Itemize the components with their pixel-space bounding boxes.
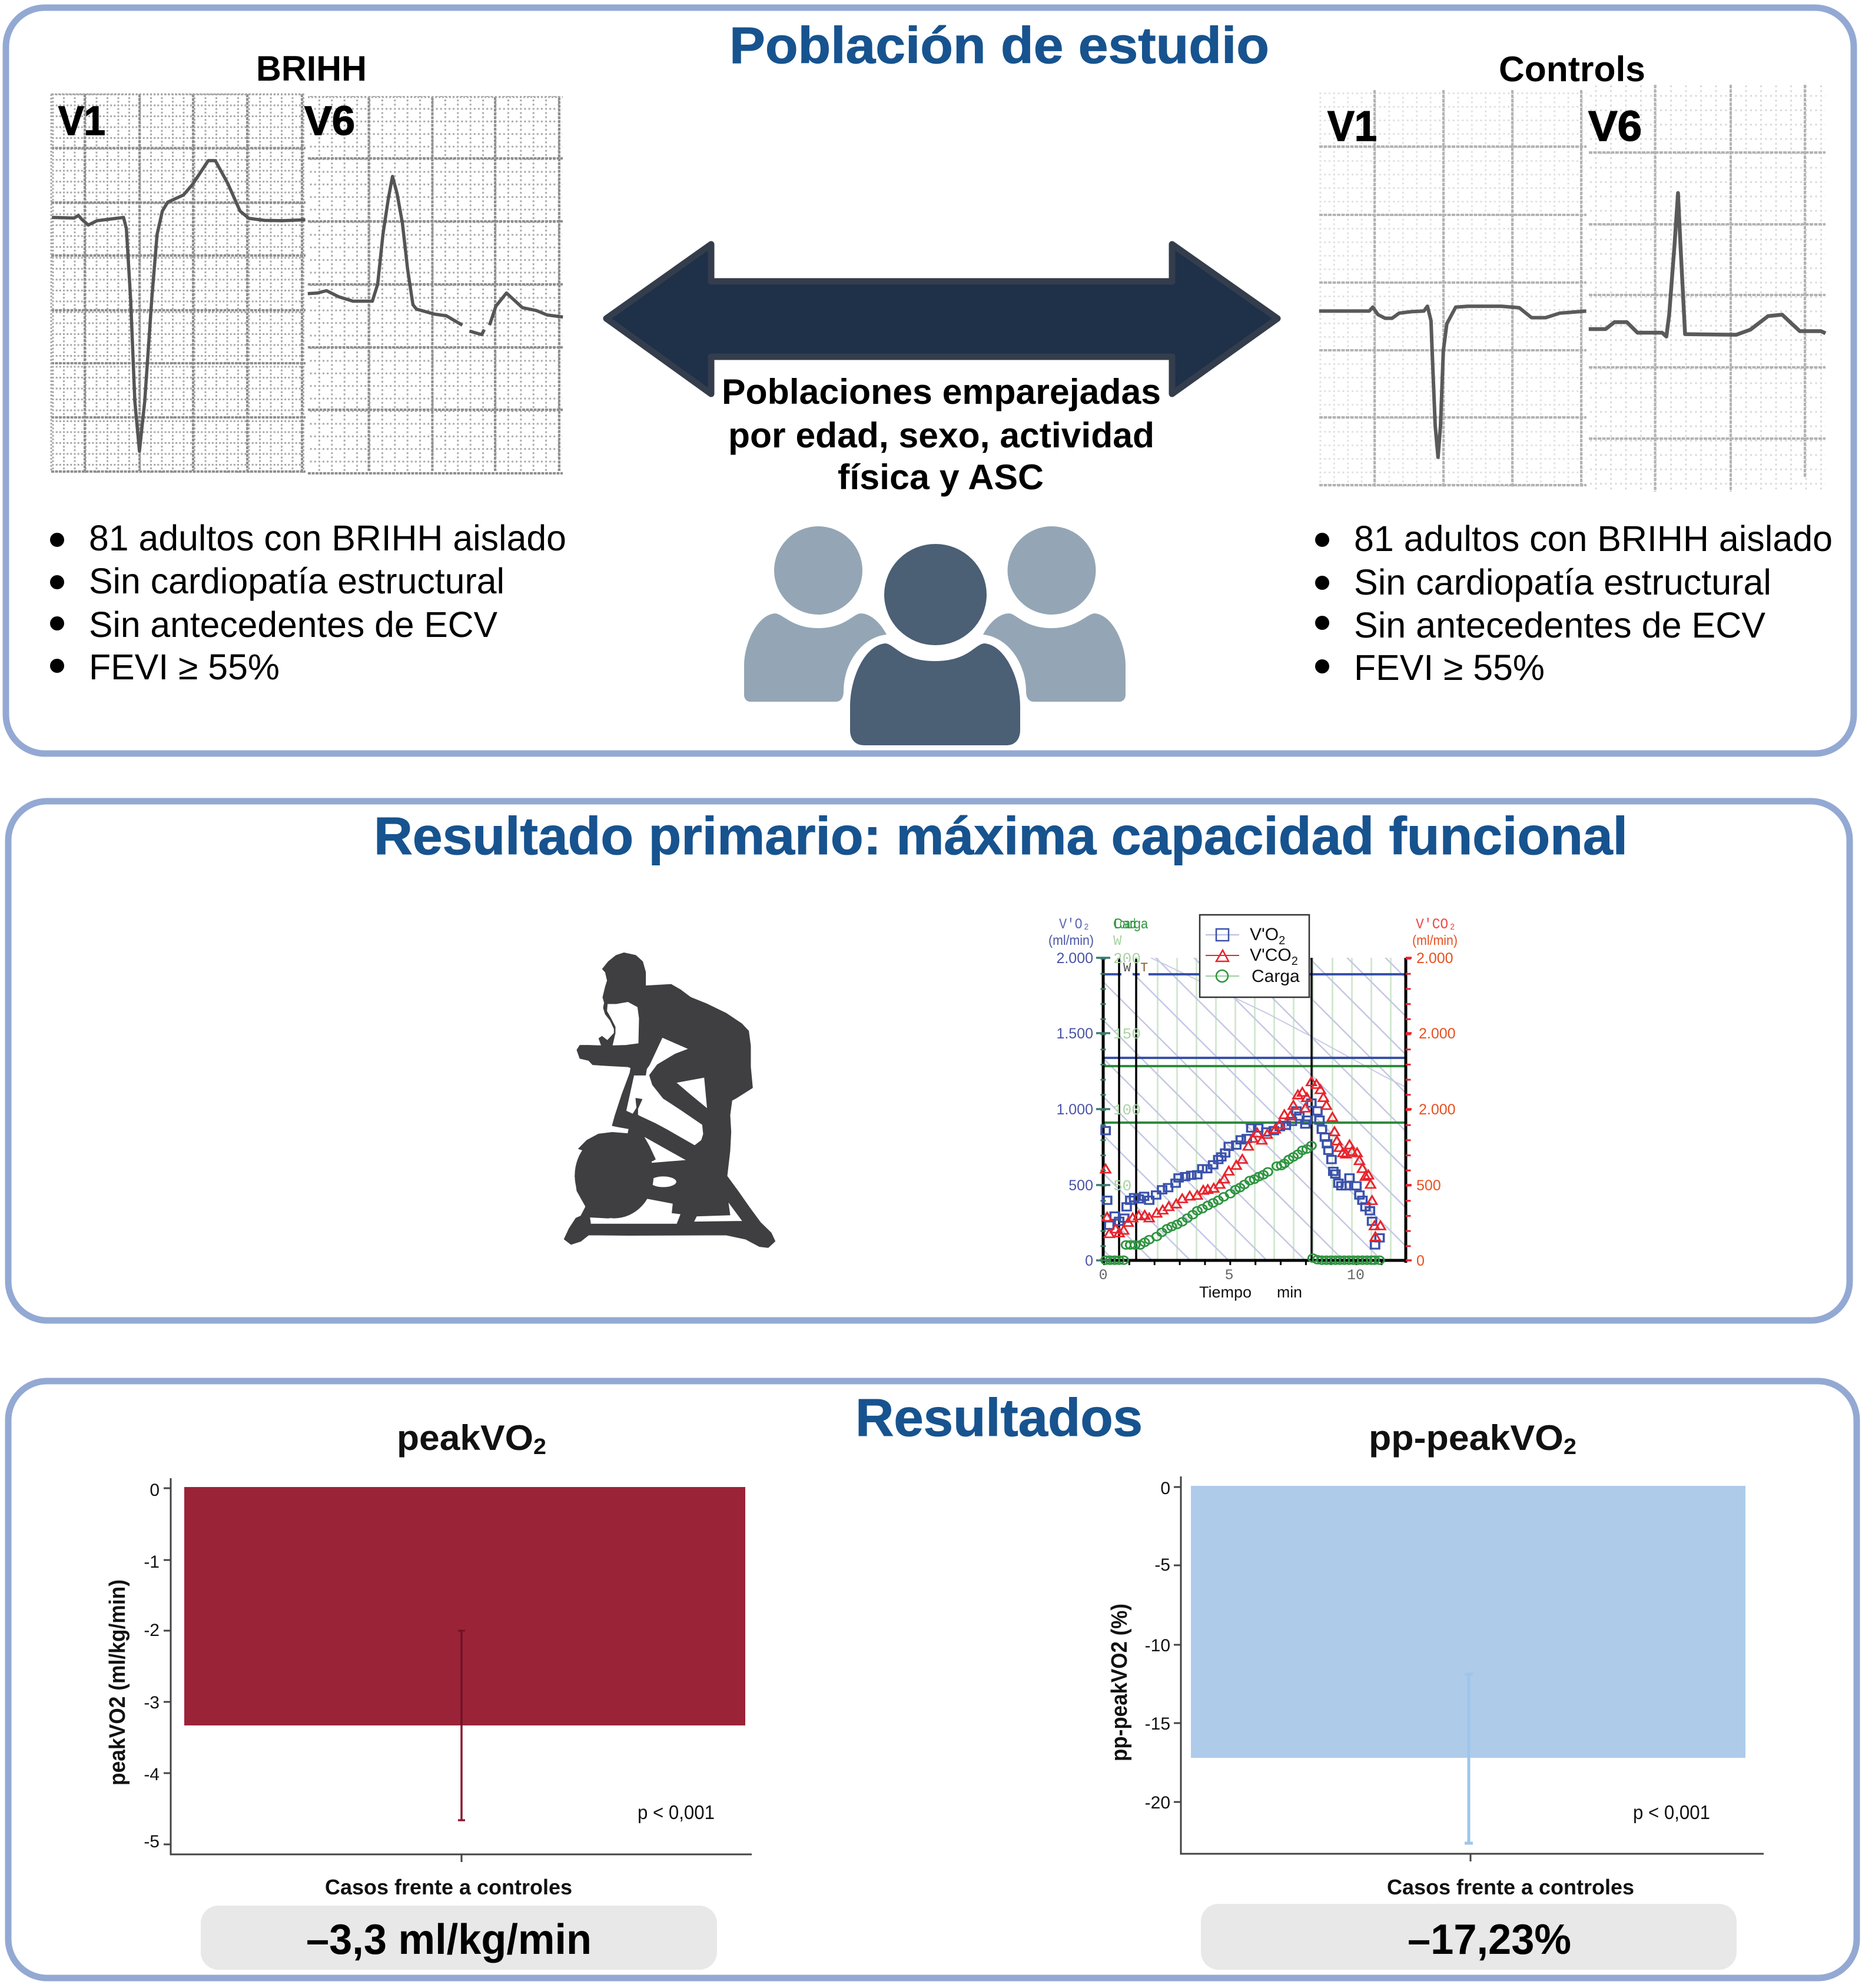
legend: 2 — [1292, 955, 1298, 968]
text: poblaciones emparejadas: por edad, sexo, actividad — [728, 416, 1154, 455]
y tick labels: -1 — [144, 1552, 160, 1572]
chart: pp-peakVO2 — [1107, 1418, 1764, 1970]
y axis label: peakVO2 (ml/kg/min) — [105, 1579, 130, 1785]
list: Controls criteria: FEVI ≥ 55% — [1354, 648, 1545, 688]
right axis labels: 2.000 — [1419, 1025, 1456, 1042]
left axis labels: 1.000 — [1056, 1101, 1093, 1118]
axis headers — [1048, 916, 1458, 977]
x axis labels — [1098, 1267, 1365, 1284]
y tick labels: -2 — [144, 1621, 160, 1640]
icon: cyclist on exercise bike — [564, 953, 775, 1247]
axis headers: W — [1113, 934, 1122, 950]
axes — [164, 1478, 752, 1862]
load axis labels: 150 — [1113, 1025, 1141, 1043]
reference lines — [1103, 974, 1406, 1123]
result pill: –17,23% — [1408, 1916, 1571, 1963]
icon: group of people — [744, 526, 1126, 745]
axis headers: V'O₂ — [1059, 916, 1090, 933]
load axis labels: 200 — [1113, 950, 1141, 968]
right axis labels: 2.000 — [1419, 1101, 1456, 1118]
bar — [184, 1487, 745, 1725]
label: V6: V6 — [1588, 103, 1642, 150]
list: Controls criteria: Sin antecedentes de ECV — [1354, 605, 1765, 645]
chart title: pp-peakVO — [1369, 1418, 1555, 1458]
left axis labels: 500 — [1068, 1177, 1093, 1194]
y tick labels — [144, 1481, 160, 1851]
threshold lines and axes — [1102, 958, 1407, 1263]
label: V1: V1 — [58, 98, 105, 144]
axis headers: Carga — [1113, 916, 1149, 932]
right axis labels: 500 — [1416, 1177, 1441, 1194]
list: BRIHH criteria: FEVI ≥ 55% — [89, 647, 280, 687]
trace: V6 — [308, 177, 563, 334]
right axis labels: 2.000 — [1416, 950, 1453, 967]
load axis labels: 50 — [1113, 1177, 1131, 1195]
chart title: 2 — [1564, 1435, 1576, 1459]
panel: resultados — [8, 1381, 1857, 1978]
x axis labels: 5 — [1224, 1267, 1234, 1284]
y tick labels: -5 — [144, 1832, 160, 1851]
left axis labels: 0 — [1085, 1253, 1093, 1269]
axis headers: T — [1140, 961, 1148, 975]
legend — [1200, 915, 1309, 997]
chart: peakVO2 — [105, 1418, 752, 1970]
left axis labels: 2.000 — [1056, 950, 1093, 967]
trace: V1 — [1319, 306, 1586, 457]
p value: p < 0,001 — [1633, 1801, 1710, 1823]
y tick labels: -4 — [144, 1765, 160, 1784]
y tick labels — [1145, 1479, 1170, 1813]
y tick labels: -15 — [1145, 1714, 1170, 1734]
p value: p < 0,001 — [638, 1801, 715, 1823]
arrow: double-headed — [606, 244, 1277, 394]
chart title: peakVO — [397, 1418, 528, 1458]
list: BRIHH criteria: 81 adultos con BRIHH aislado — [89, 518, 566, 558]
ECG: Controls V1 — [1319, 90, 1586, 487]
chart background hatching — [1103, 958, 1406, 1260]
list: Controls criteria — [1315, 519, 1833, 688]
y tick labels: -5 — [1154, 1555, 1170, 1575]
panel: resultado primario — [8, 801, 1850, 1320]
y tick labels: -10 — [1145, 1636, 1170, 1655]
title: Resultado primario: Resultado primario: máxima capacidad funcional — [374, 807, 1628, 866]
panel: población de estudio — [6, 8, 1854, 754]
axes — [1174, 1476, 1764, 1861]
trace: V1 — [52, 161, 306, 451]
ECG: BRIHH V6 — [304, 96, 563, 473]
axis headers: V'CO₂ — [1416, 916, 1456, 933]
bar — [1191, 1486, 1745, 1758]
title: Población de estudio: Población de estudio — [729, 17, 1269, 74]
x axis labels: 10 — [1347, 1267, 1365, 1284]
ECG: Controls V6 — [1588, 85, 1826, 492]
x axis labels: 0 — [1098, 1267, 1108, 1284]
x axis label: Casos frente a controles — [325, 1875, 572, 1899]
label: V6: V6 — [304, 98, 355, 144]
label: V1: V1 — [1327, 103, 1377, 150]
x axis title — [1199, 1283, 1302, 1301]
chart: cardiopulmonary exercise test — [1048, 915, 1458, 1301]
legend: V'CO — [1250, 945, 1292, 965]
error bar — [1465, 1673, 1473, 1843]
x axis title: min — [1277, 1283, 1302, 1301]
chart title: 2 — [533, 1435, 546, 1459]
result pill — [201, 1906, 717, 1970]
axis headers: W — [1123, 961, 1131, 975]
result pill — [1201, 1904, 1737, 1970]
legend: V'O — [1250, 925, 1279, 944]
result pill: –3,3 ml/kg/min — [306, 1916, 592, 1963]
text: poblaciones emparejadas: Poblaciones emparejadas — [722, 372, 1161, 411]
list: BRIHH criteria: Sin cardiopatía estructural — [89, 561, 505, 601]
y axis label: pp-peakVO2 (%) — [1107, 1604, 1132, 1761]
trace: V6 — [1589, 193, 1826, 337]
axis headers: (ml/min) — [1412, 932, 1458, 948]
series: VO2, VCO2, load — [1106, 1082, 1380, 1260]
list: BRIHH criteria: Sin antecedentes de ECV — [89, 605, 497, 645]
load axis labels: 100 — [1113, 1101, 1141, 1119]
legend: Carga — [1252, 967, 1300, 986]
x axis title: Tiempo — [1199, 1283, 1252, 1301]
axis headers: (ml/min) — [1048, 932, 1094, 948]
heading: BRIHH: BRIHH — [256, 49, 367, 88]
list: BRIHH criteria — [50, 518, 566, 687]
heading: Controls: Controls — [1499, 49, 1645, 89]
y tick labels: -20 — [1145, 1793, 1170, 1813]
text: poblaciones emparejadas: física y ASC — [838, 457, 1044, 497]
list: Controls criteria: 81 adultos con BRIHH aislado — [1354, 519, 1833, 559]
text: poblaciones emparejadas — [722, 372, 1161, 497]
right axis labels — [1416, 950, 1456, 1269]
title: Resultados: Resultados — [855, 1389, 1143, 1448]
y tick labels: -3 — [144, 1693, 160, 1712]
left axis labels: 1.500 — [1056, 1025, 1093, 1042]
legend: 2 — [1279, 934, 1285, 947]
load axis labels — [1113, 950, 1141, 1195]
list: Controls criteria: Sin cardiopatía estructural — [1354, 562, 1771, 602]
x axis label: Casos frente a controles — [1387, 1875, 1634, 1899]
left axis labels — [1056, 950, 1093, 1269]
right axis labels: 0 — [1416, 1253, 1425, 1269]
error bar — [458, 1631, 465, 1820]
ECG: BRIHH V1 — [51, 93, 306, 473]
axis headers: Load — [1114, 916, 1136, 932]
y tick labels: 0 — [150, 1481, 160, 1500]
y tick labels: 0 — [1160, 1479, 1170, 1498]
